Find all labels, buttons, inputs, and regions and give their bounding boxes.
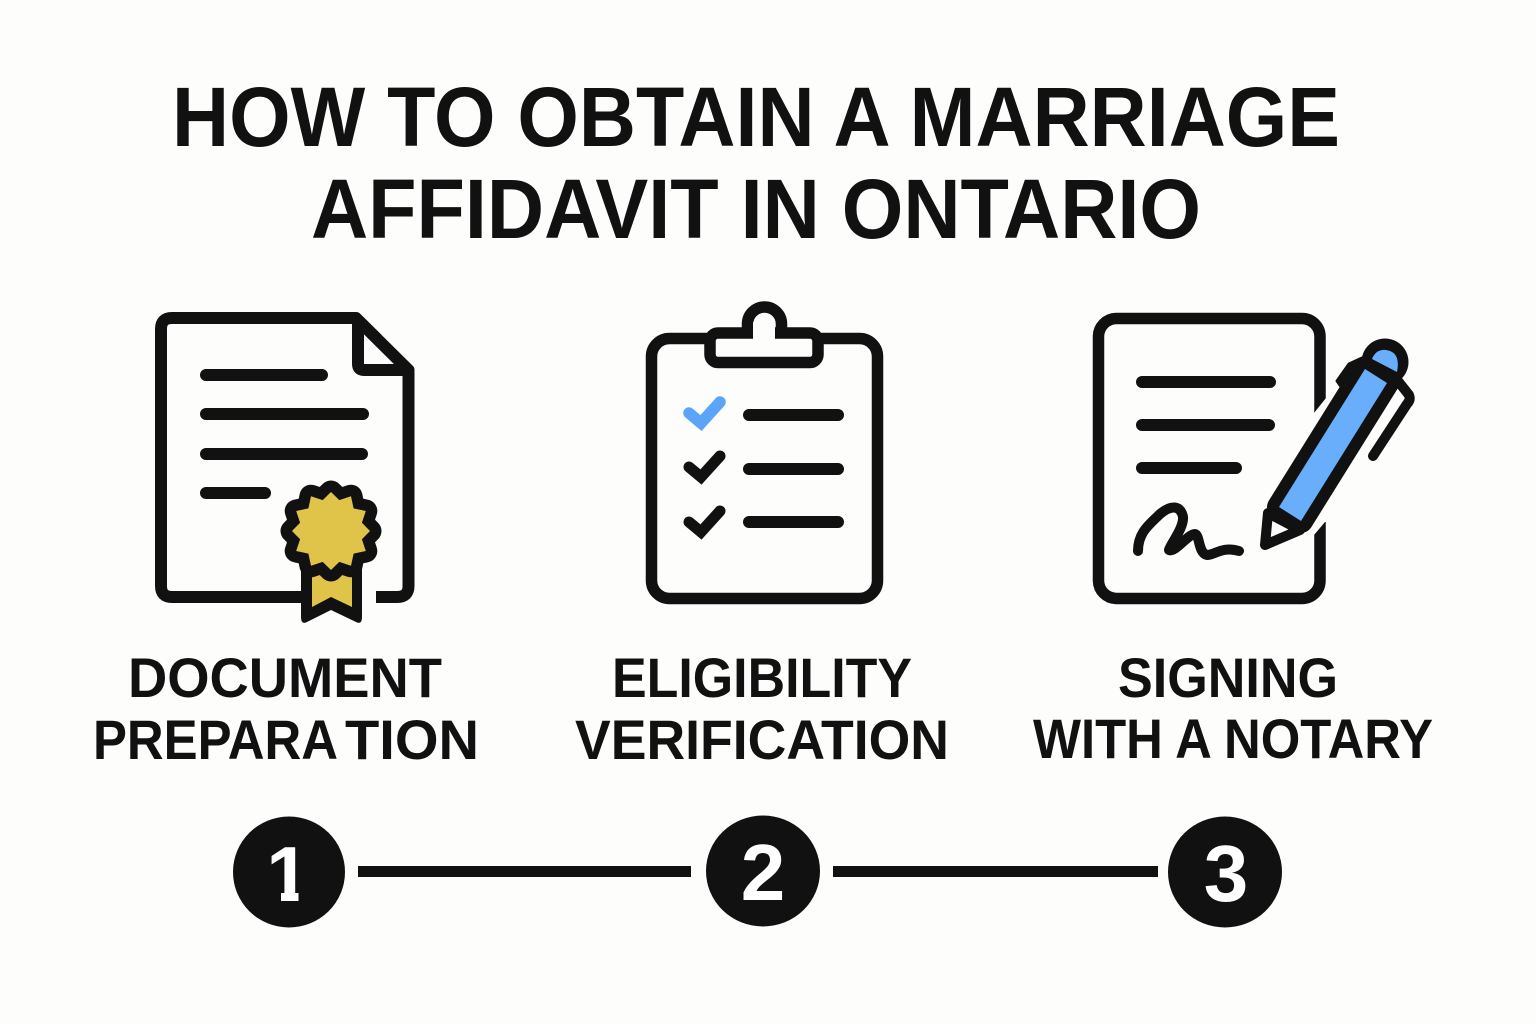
page cuts <box>1308 398 1332 535</box>
label: signing with a notary: SIGNING <box>1118 646 1338 709</box>
label: document preparation <box>93 646 479 771</box>
seal outline <box>292 492 370 570</box>
page fold <box>358 318 408 370</box>
text lines <box>206 375 363 493</box>
clip <box>710 333 818 362</box>
signature <box>1138 508 1239 555</box>
text lines <box>1142 382 1270 468</box>
black check 2 <box>689 456 720 477</box>
board <box>652 338 878 598</box>
clip opening <box>753 322 775 344</box>
pen clip <box>1373 381 1410 456</box>
label: eligibility verification: VERIFICATION <box>575 708 949 771</box>
ribbon <box>301 555 362 623</box>
pen cap <box>1362 338 1408 386</box>
title: HOW TO OBTAIN A MARRIAGE <box>172 70 1340 164</box>
seal fill <box>292 492 370 570</box>
page outline <box>1098 318 1320 598</box>
title: AFFIDAVIT IN ONTARIO <box>311 162 1201 256</box>
title <box>172 70 1340 256</box>
icon: signed document with pen <box>1098 318 1410 598</box>
label: document preparation: DOCUMENT <box>128 646 442 709</box>
step 2 badge <box>706 816 820 926</box>
connector 1-2 <box>358 866 691 877</box>
step 3 badge: 3 <box>1204 829 1248 918</box>
pen cap fill <box>1372 350 1398 372</box>
page outline <box>161 318 408 597</box>
label: signing with a notary <box>1033 646 1433 770</box>
ribbon fill <box>312 572 352 607</box>
clip hook <box>748 307 782 335</box>
icon: document with seal <box>161 318 408 623</box>
step 1 badge <box>233 816 345 928</box>
label: eligibility verification <box>575 646 949 771</box>
label: document preparation: PREPARA <box>93 708 338 771</box>
label: signing with a notary: WITH A NOTARY <box>1033 707 1433 770</box>
pen tip <box>1265 513 1300 545</box>
label: eligibility verification: ELIGIBILITY <box>612 646 912 709</box>
pen body fill <box>1279 369 1387 521</box>
blue check <box>689 402 720 423</box>
step 2 badge: 2 <box>741 828 785 917</box>
label: document preparation: TION <box>345 708 479 771</box>
connector 2-3 <box>833 866 1158 877</box>
pen shoulder <box>1337 358 1375 388</box>
pen body outline <box>1279 369 1387 521</box>
checklist lines <box>749 415 838 522</box>
step 1 badge: 1 <box>266 830 310 918</box>
step 3 badge <box>1168 816 1282 928</box>
black check 3 <box>689 511 720 532</box>
icon: clipboard checklist <box>652 307 878 598</box>
